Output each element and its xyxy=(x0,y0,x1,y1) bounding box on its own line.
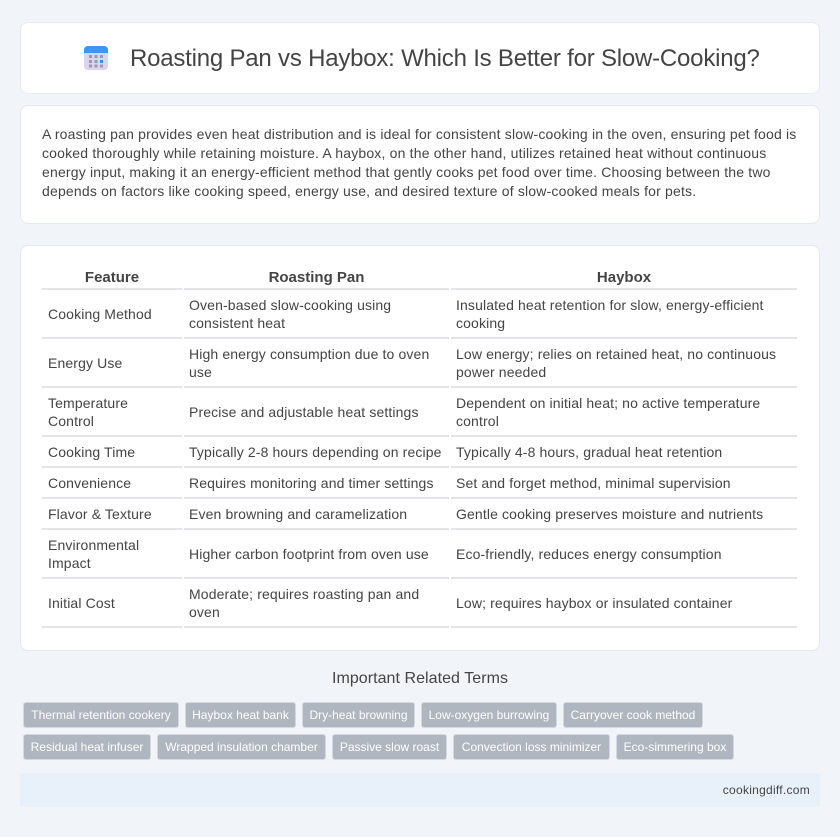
intro text: A roasting pan provides even heat distribution and is ideal for consistent slow-cooking in the oven, ensuring pet food is xyxy=(42,126,796,142)
comparison table: Initial Cost xyxy=(48,595,115,611)
comparison table: Gentle cooking preserves moisture and nutrients xyxy=(456,506,763,522)
comparison table xyxy=(42,269,797,628)
comparison table: oven xyxy=(189,604,220,620)
header card xyxy=(20,22,820,94)
comparison table: Typically 4-8 hours, gradual heat retention xyxy=(456,444,722,460)
comparison table: Even browning and caramelization xyxy=(189,506,407,522)
comparison table: use xyxy=(189,364,212,380)
intro panel xyxy=(20,105,820,224)
footer source: cookingdiff.com xyxy=(723,783,810,797)
comparison table: Low energy; relies on retained heat, no continuous xyxy=(456,346,776,362)
comparison table: Feature xyxy=(85,269,139,286)
comparison table: Low; requires haybox or insulated container xyxy=(456,595,732,611)
related term tags: Thermal retention cookery xyxy=(31,708,171,722)
intro text xyxy=(42,126,796,199)
footer bar xyxy=(20,773,820,807)
related term tags: Passive slow roast xyxy=(340,740,439,754)
related term tags: Wrapped insulation chamber xyxy=(165,740,318,754)
comparison table: Haybox xyxy=(597,269,651,286)
comparison table: Eco-friendly, reduces energy consumption xyxy=(456,546,722,562)
related term tags: Convection loss minimizer xyxy=(462,740,601,754)
comparison table: Convenience xyxy=(48,475,131,491)
comparison table: Environmental xyxy=(48,537,139,553)
intro text: cooked thoroughly while retaining moisture. A haybox, on the other hand, utilizes retained heat without continuous xyxy=(42,145,766,161)
comparison table: Typically 2-8 hours depending on recipe xyxy=(189,444,442,460)
related term tags: Haybox heat bank xyxy=(192,708,289,722)
comparison table: Flavor & Texture xyxy=(48,506,152,522)
comparison table: Oven-based slow-cooking using xyxy=(189,297,391,313)
heading: related terms: Important Related Terms xyxy=(332,670,508,687)
comparison table: Precise and adjustable heat settings xyxy=(189,404,419,420)
related term tags: Eco-simmering box xyxy=(624,740,726,754)
related term tags: Dry-heat browning xyxy=(309,708,408,722)
intro text: energy input, making it an energy-efficient method that gently cooks pet food over time. Choosing between the two xyxy=(42,164,771,180)
related term tags xyxy=(23,702,734,760)
comparison table: High energy consumption due to oven xyxy=(189,346,429,362)
comparison table: Temperature xyxy=(48,395,128,411)
comparison table: Insulated heat retention for slow, energy-efficient xyxy=(456,297,764,313)
comparison table: control xyxy=(456,413,499,429)
comparison table: cooking xyxy=(456,315,505,331)
comparison table: Impact xyxy=(48,555,91,571)
icon: calendar xyxy=(84,46,108,70)
comparison table: power needed xyxy=(456,364,546,380)
comparison table: Set and forget method, minimal supervision xyxy=(456,475,731,491)
comparison table: consistent heat xyxy=(189,315,285,331)
comparison table: Cooking Time xyxy=(48,444,135,460)
comparison table: Requires monitoring and timer settings xyxy=(189,475,434,491)
related term tags: Carryover cook method xyxy=(571,708,695,722)
comparison table: Moderate; requires roasting pan and xyxy=(189,586,419,602)
title: Roasting Pan vs Haybox: Which Is Better for Slow-Cooking? xyxy=(130,45,760,72)
comparison table: Energy Use xyxy=(48,355,122,371)
intro text: depends on factors like cooking speed, energy use, and desired texture of slow-cooked meals for pets. xyxy=(42,183,696,199)
comparison table: Roasting Pan xyxy=(269,269,364,286)
comparison table: Control xyxy=(48,413,94,429)
related term tags: Residual heat infuser xyxy=(31,740,143,754)
related term tags: Low-oxygen burrowing xyxy=(429,708,549,722)
comparison table: Higher carbon footprint from oven use xyxy=(189,546,429,562)
comparison table: Cooking Method xyxy=(48,306,152,322)
panel: comparison table xyxy=(20,245,820,651)
comparison table: Dependent on initial heat; no active temperature xyxy=(456,395,760,411)
